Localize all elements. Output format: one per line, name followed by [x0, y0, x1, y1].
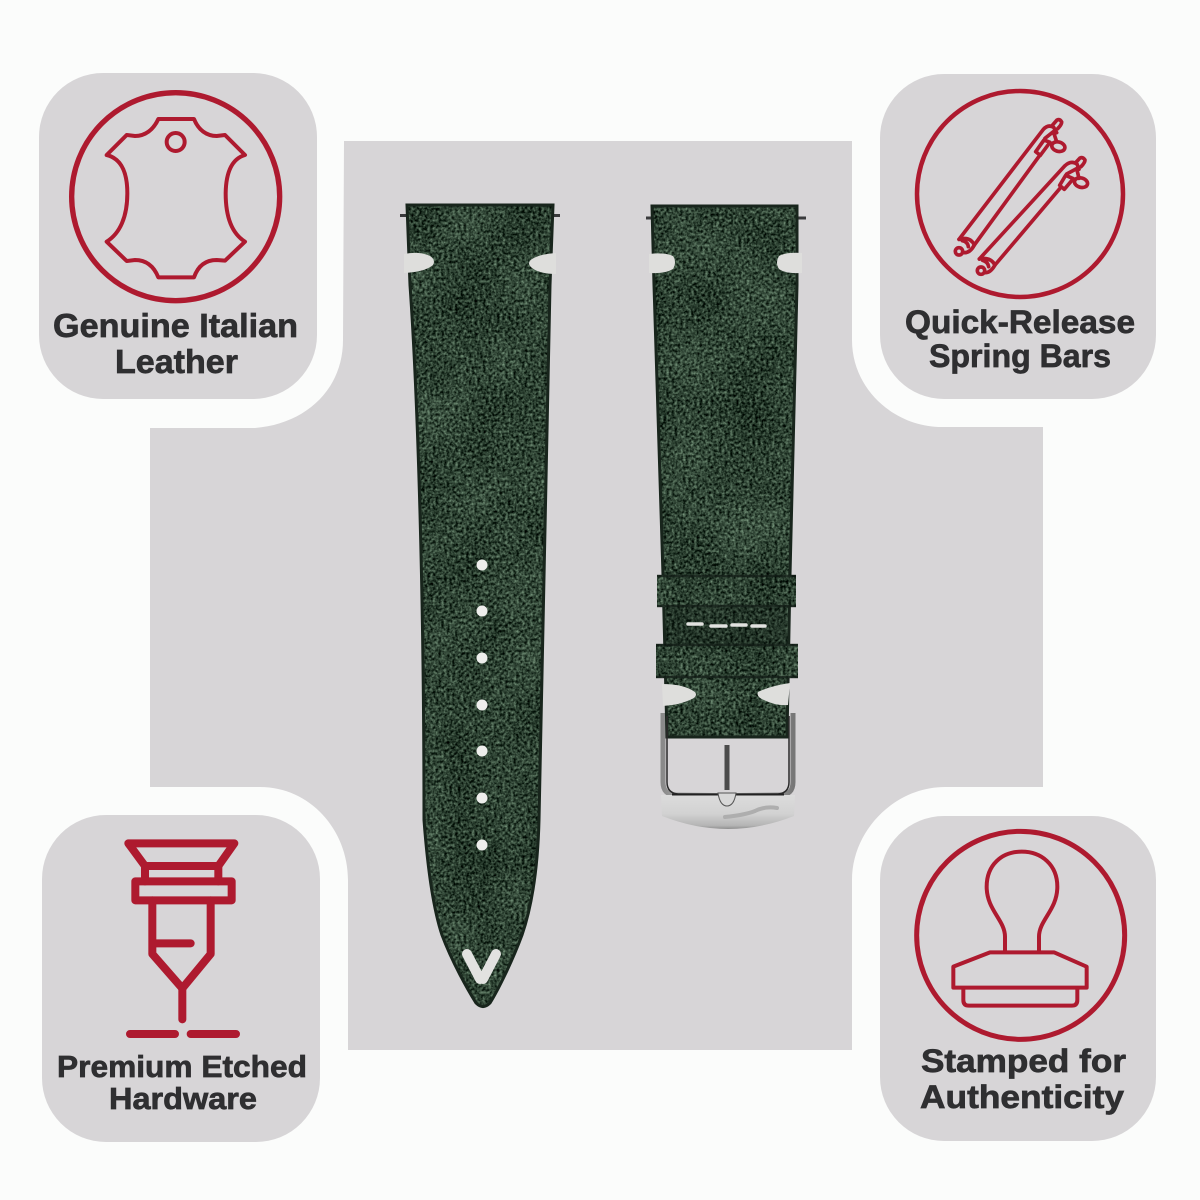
- label: premium etched hardware: [57, 1049, 307, 1116]
- buckle inner line: [667, 716, 789, 794]
- keeper shadows: [656, 576, 798, 677]
- watch strap: buckle piece: [646, 206, 806, 829]
- tongue hinge: [718, 793, 736, 806]
- spring bar ends: [646, 216, 806, 220]
- label: genuine italian leather: Genuine Italian: [53, 307, 298, 344]
- top stitching: [649, 253, 802, 273]
- shaded strap between keepers: [666, 605, 787, 645]
- card background: [39, 73, 317, 399]
- label: genuine italian leather: [53, 307, 298, 380]
- leather body: [652, 206, 797, 737]
- panel: stamped for authenticity: [880, 816, 1156, 1141]
- label: stamped for authenticity: [920, 1043, 1126, 1115]
- panel: premium etched hardware: [42, 815, 320, 1142]
- lower keeper: [656, 644, 798, 678]
- panel: genuine italian leather: [39, 73, 317, 399]
- strap edge: [407, 205, 553, 1006]
- panel: quick-release spring bars: [880, 74, 1156, 399]
- buckle engraving: [725, 807, 777, 817]
- strap edge: [652, 206, 797, 737]
- card background: [880, 74, 1156, 399]
- top stitching: [404, 253, 556, 274]
- plate top line: [672, 794, 784, 796]
- icon: spring bars: [955, 120, 1089, 274]
- label: quick-release spring bars: Quick-Release: [905, 304, 1135, 340]
- card background: [42, 815, 320, 1142]
- card background: [880, 816, 1156, 1141]
- icon: laser etching nozzle: [128, 843, 236, 1034]
- label: stamped for authenticity: Authenticity: [920, 1079, 1124, 1115]
- buckle stitching: [662, 683, 790, 706]
- dark tongue centre: [724, 745, 730, 790]
- label: stamped for authenticity: Stamped for: [921, 1043, 1126, 1079]
- central grey backdrop panel: [150, 141, 1043, 1050]
- spring bar ends: [400, 214, 560, 217]
- tip V stitch: [467, 954, 496, 979]
- icon: circle outline: [917, 91, 1123, 297]
- watch strap: long piece: [400, 205, 560, 1006]
- leather body: [407, 205, 553, 1006]
- label: premium etched hardware: Premium Etched: [57, 1049, 307, 1084]
- icon: rubber stamp in circle: [917, 831, 1125, 1039]
- keeper stitching: [688, 624, 765, 626]
- icon: leather hide in circle: [72, 93, 280, 301]
- buckle tongue: [724, 724, 730, 802]
- label: quick-release spring bars: [905, 304, 1135, 374]
- label: genuine italian leather: Leather: [115, 343, 238, 380]
- buckle plate: [661, 795, 795, 829]
- label: premium etched hardware: Hardware: [109, 1081, 257, 1116]
- label: quick-release spring bars: Spring Bars: [929, 338, 1111, 374]
- buckle holes: [476, 560, 488, 850]
- upper keeper: [657, 575, 796, 607]
- buckle frame: [663, 713, 793, 795]
